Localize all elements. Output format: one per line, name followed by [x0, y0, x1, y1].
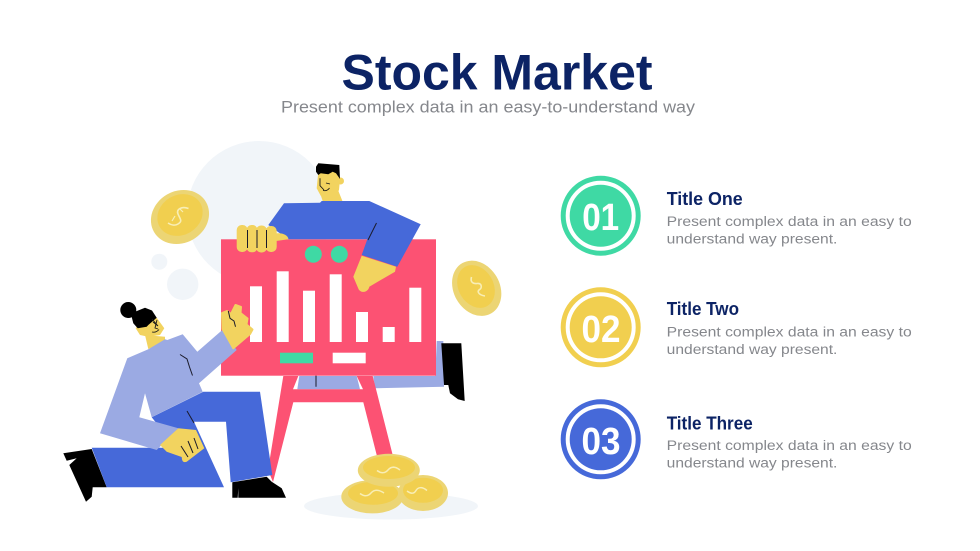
icon: coin left — [141, 179, 219, 255]
board indicators — [280, 246, 366, 363]
woman sweater — [100, 330, 237, 450]
text block 03: understand way present. — [667, 455, 837, 471]
man hand on board — [237, 225, 288, 252]
text block 02 — [667, 325, 912, 358]
woman trousers — [92, 392, 272, 487]
badge 01: 01 — [582, 197, 619, 239]
subtitle: Present complex data in an easy-to-understand way — [281, 98, 696, 116]
man legs behind board — [297, 341, 465, 401]
badge 01 — [563, 178, 638, 253]
item 03 — [563, 402, 912, 477]
illustration: stock market board with two people — [63, 141, 511, 520]
woman raised hand — [222, 305, 252, 348]
text block 02: Present complex data in an easy to — [667, 325, 912, 341]
title: Stock Market — [342, 44, 653, 100]
item 01 — [563, 178, 912, 253]
man torso and arm — [268, 201, 421, 292]
background blobs — [151, 141, 478, 520]
easel stand — [268, 376, 393, 482]
badge 03: 03 — [582, 421, 620, 463]
icon: coin right — [442, 252, 511, 325]
badge 02 — [563, 290, 638, 365]
text block 02: understand way present. — [667, 342, 837, 358]
heading: title three: Title Three — [667, 413, 753, 433]
badge 02: 02 — [582, 309, 620, 351]
woman lower hand — [160, 428, 204, 462]
badge 03 — [563, 402, 638, 477]
man head and neck — [316, 163, 344, 202]
board — [221, 239, 436, 376]
item 02 — [563, 290, 912, 365]
text block 03 — [667, 438, 912, 471]
bar chart — [250, 271, 421, 342]
woman — [63, 302, 286, 502]
icon: coin stack — [341, 454, 448, 513]
text block 01: understand way present. — [667, 231, 837, 247]
text block 03: Present complex data in an easy to — [667, 438, 912, 454]
text block 01 — [667, 214, 912, 247]
woman shoes — [63, 449, 286, 502]
heading: title two: Title Two — [667, 299, 739, 319]
heading: title one: Title One — [667, 189, 743, 209]
text block 01: Present complex data in an easy to — [667, 214, 912, 230]
woman neck and head — [145, 335, 165, 349]
